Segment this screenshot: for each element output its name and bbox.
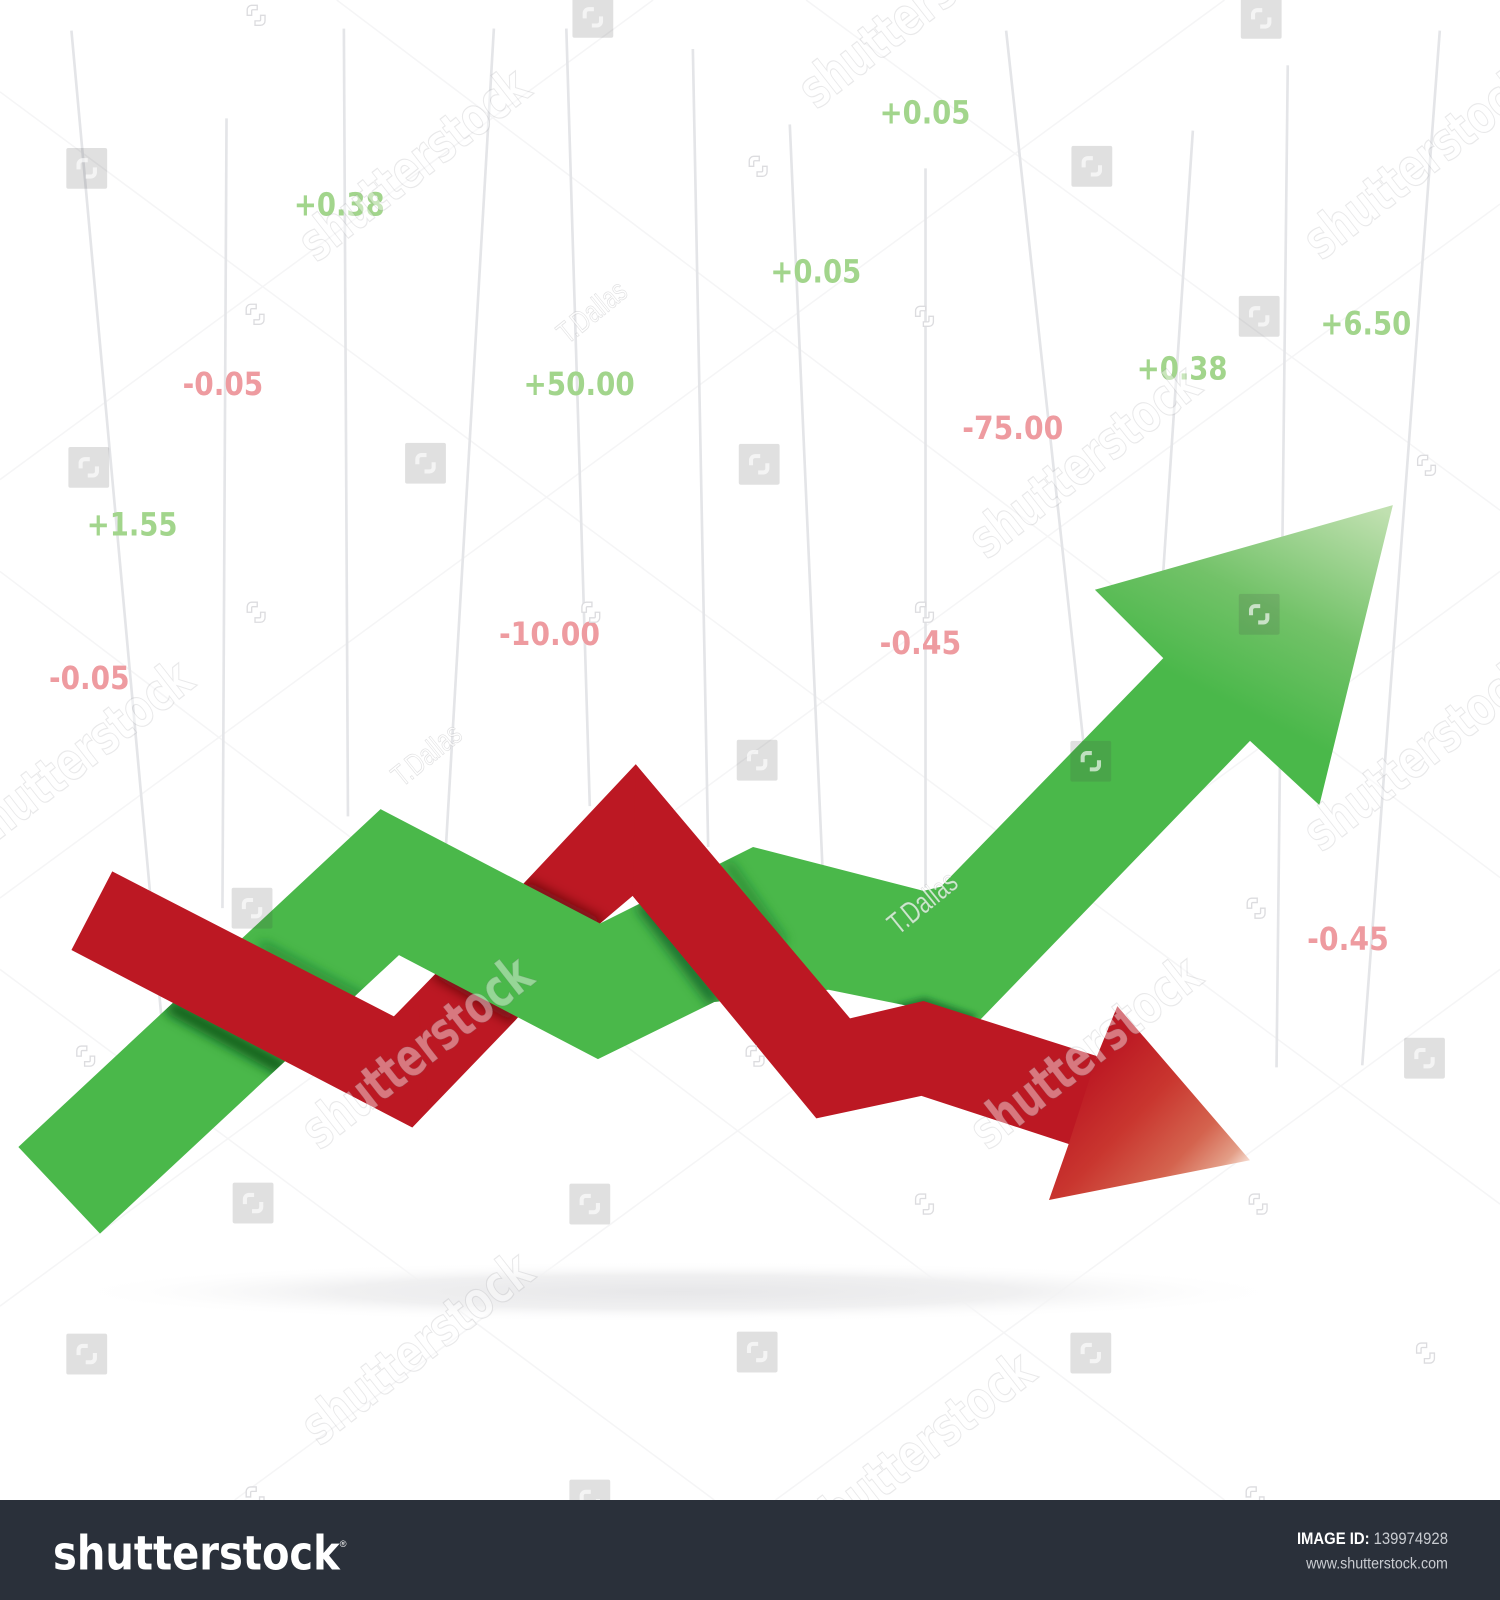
watermark text: shutterstock bbox=[957, 351, 1213, 570]
watermark text: shutterstock bbox=[289, 942, 545, 1161]
chart grid lines bbox=[71, 29, 1440, 1067]
value labels: -0.05 bbox=[183, 367, 263, 403]
green arrow bbox=[18, 505, 1393, 1234]
red arrow left segment bbox=[71, 871, 429, 1128]
value labels: +1.55 bbox=[87, 508, 178, 544]
registered mark: ® bbox=[340, 1539, 347, 1549]
footer bar bbox=[0, 1500, 1500, 1600]
value labels: -0.45 bbox=[880, 626, 961, 662]
footer website: www.shutterstock.com bbox=[1305, 1555, 1448, 1572]
footer image id: IMAGE ID: 139974928 bbox=[1297, 1530, 1448, 1548]
red arrow underlayer bbox=[394, 764, 673, 1128]
value labels bbox=[49, 95, 1411, 958]
footer logo: shutterstock bbox=[53, 1526, 341, 1581]
value labels: -75.00 bbox=[962, 411, 1063, 447]
ground shadow bbox=[61, 1261, 1296, 1322]
value labels: -0.45 bbox=[1307, 922, 1389, 958]
watermark text: T.Dallas bbox=[881, 865, 964, 941]
red arrow right segment and head bbox=[633, 764, 1250, 1200]
value labels: +0.38 bbox=[294, 187, 385, 223]
value labels: +50.00 bbox=[523, 367, 635, 403]
watermark text: shutterstock bbox=[958, 942, 1214, 1161]
watermark text: T.Dallas bbox=[385, 717, 468, 793]
watermark text: T.Dallas bbox=[550, 274, 634, 350]
value labels: +6.50 bbox=[1320, 307, 1411, 343]
value labels: -10.00 bbox=[499, 617, 600, 653]
value labels: -0.05 bbox=[49, 661, 130, 697]
value labels: +0.05 bbox=[770, 255, 861, 291]
value labels: +0.38 bbox=[1137, 352, 1228, 388]
watermark text: shutterstock bbox=[791, 1338, 1048, 1557]
value labels: +0.05 bbox=[880, 95, 970, 131]
watermark text: shutterstock bbox=[289, 1238, 545, 1457]
